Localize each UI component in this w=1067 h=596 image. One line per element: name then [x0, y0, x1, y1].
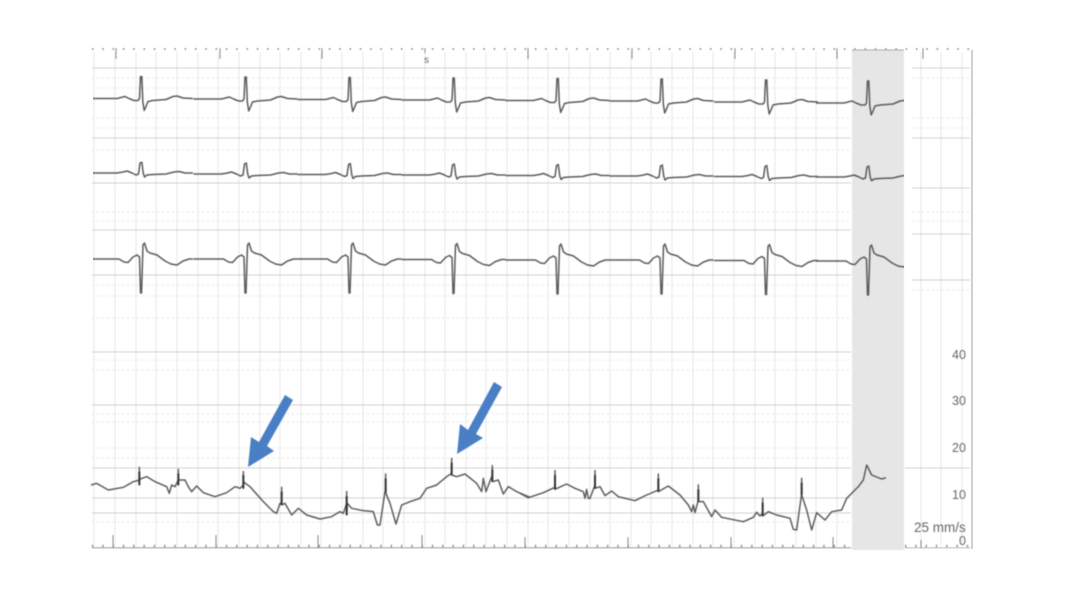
seconds label: s [424, 55, 429, 66]
pressure scale labels: 10 [952, 488, 966, 502]
ECG lead 3 [89, 243, 920, 295]
pressure scale labels: 30 [952, 394, 966, 408]
pressure scale labels: 0 [959, 534, 966, 548]
shaded band [852, 50, 904, 550]
bottom time axis [92, 535, 970, 548]
ECG chart [90, 48, 973, 550]
top time axis [92, 48, 972, 59]
ECG lead 2 [89, 162, 920, 181]
chart frame right edge [971, 50, 973, 549]
pressure scale labels: 20 [952, 441, 966, 455]
pressure scale labels: 40 [952, 348, 966, 362]
arrow: first marker [248, 395, 293, 467]
pressure scale labels [952, 348, 966, 548]
pressure trace [91, 458, 886, 530]
ECG lead 1 [89, 76, 920, 115]
arrow: second marker [457, 382, 502, 454]
paper speed label: 25 mm/s [914, 520, 966, 535]
